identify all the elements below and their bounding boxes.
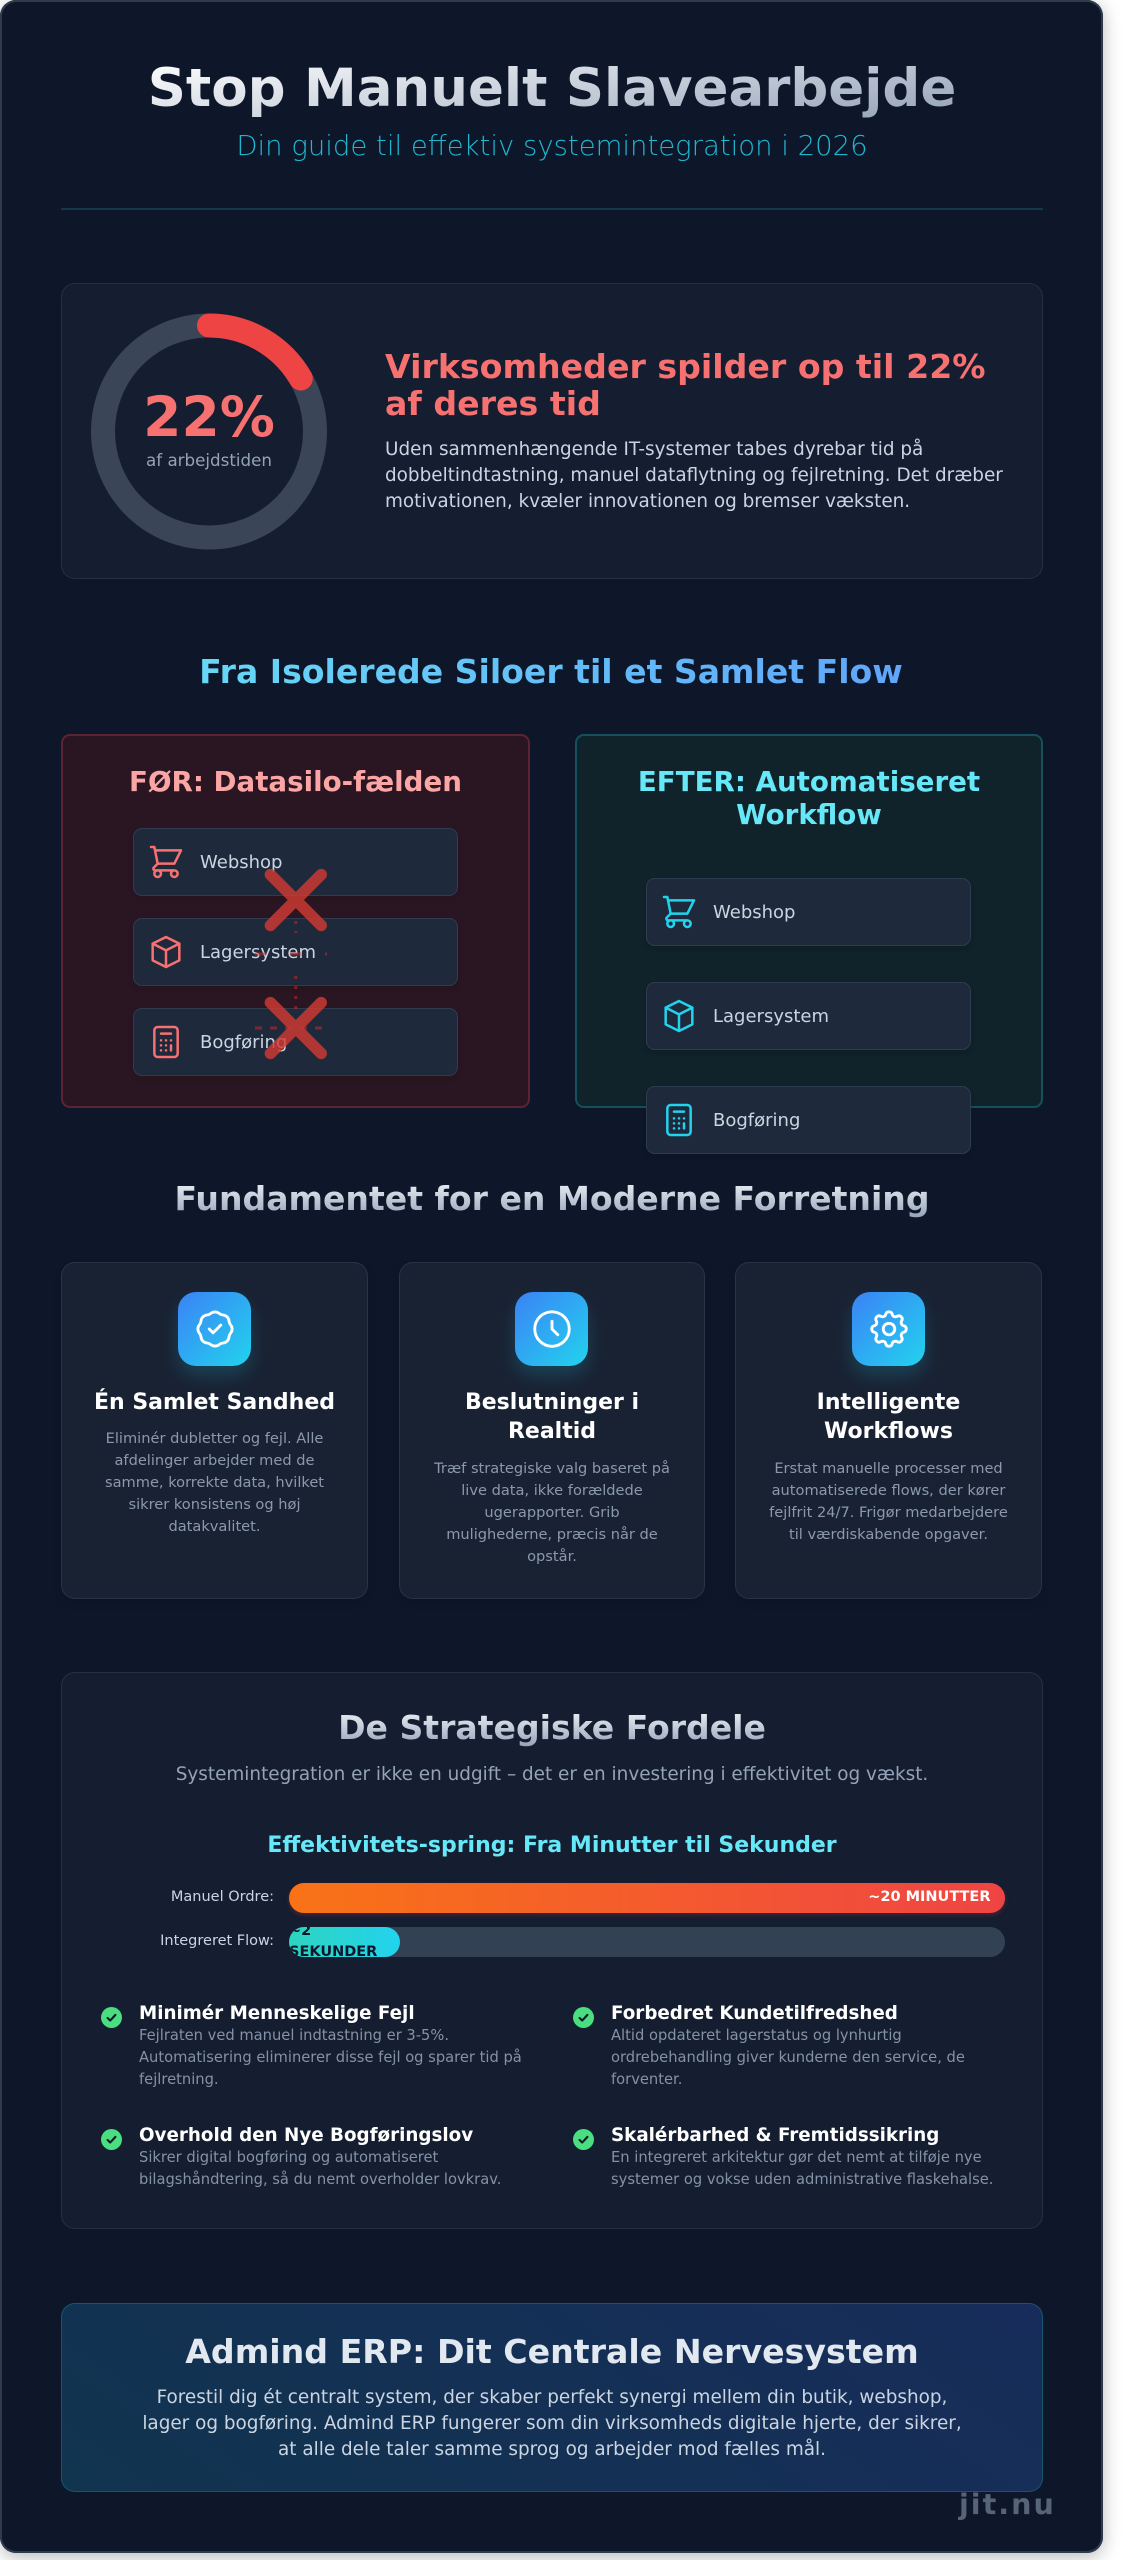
card text: ugerapporter. Grib — [484, 1504, 620, 1521]
system: lagersystem: Lagersystem — [200, 942, 316, 963]
benefit: bookkeeping law: Sikrer digital bogføring og automatiseret — [139, 2149, 438, 2166]
donut value: 22% — [143, 385, 275, 449]
system: bogforing — [646, 1086, 971, 1154]
card text — [105, 1430, 324, 1535]
bar label: manual: Manuel Ordre: — [171, 1889, 274, 1905]
card: intelligent workflows — [735, 1262, 1042, 1599]
system: lagersystem — [646, 982, 971, 1050]
stat body text — [385, 438, 1003, 512]
after heading: Workflow — [736, 798, 882, 831]
card: realtime decisions — [399, 1262, 705, 1599]
card text: automatiserede flows, der kører — [772, 1482, 1005, 1499]
benefit: fewer errors: Fejlraten ved manuel indtastning er 3-5%. — [139, 2027, 449, 2044]
bar: manual order: ~20 MINUTTER — [868, 1889, 990, 1905]
card heading: Workflows — [824, 1419, 953, 1444]
benefits heading: De Strategiske Fordele — [338, 1708, 766, 1747]
title: Stop Manuelt Slavearbejde — [148, 58, 956, 119]
benefit: scalability: systemer og vokse uden administrative flaskehalse. — [611, 2171, 993, 2188]
panel: before — [61, 734, 530, 1108]
card text: Erstat manuelle processer med — [774, 1460, 1003, 1477]
benefit: bookkeeping law: bilagshåndtering, så du nemt overholder lovkrav. — [139, 2171, 501, 2188]
system: webshop: Webshop — [200, 852, 282, 873]
stat body text: dobbeltindtastning, manuel dataflytning og fejlretning. Det dræber — [385, 465, 1003, 486]
card text: Eliminér dubletter og fejl. Alle — [106, 1430, 323, 1447]
benefit: fewer errors: Minimér Menneskelige Fejl — [139, 2003, 415, 2024]
donut caption: af arbejdstiden — [146, 450, 272, 470]
callout text: lager og bogføring. Admind ERP fungerer som din virksomheds digitale hjerte, der sikrer, — [142, 2413, 962, 2434]
system: bogforing — [133, 1008, 458, 1076]
watermark: jit.nu — [959, 2487, 1056, 2521]
benefit: customer satisfaction: forventer. — [611, 2071, 682, 2088]
after heading — [638, 765, 980, 831]
benefit: scalability: Skalérbarhed & Fremtidssikring — [611, 2125, 939, 2146]
callout text: at alle dele taler samme sprog og arbejder mod fælles mål. — [278, 2439, 826, 2460]
card heading: Én Samlet Sandhed — [94, 1390, 335, 1415]
benefit: fewer errors: fejlretning. — [139, 2071, 219, 2088]
heading: foundation: Fundamentet for en Moderne Forretning — [174, 1179, 930, 1218]
card text — [434, 1460, 670, 1565]
card heading — [465, 1390, 639, 1444]
stat body text: Uden sammenhængende IT-systemer tabes dyrebar tid på — [385, 439, 923, 460]
panel: strategic benefits — [61, 1672, 1043, 2229]
stat heading — [385, 347, 986, 423]
card: single truth — [61, 1262, 368, 1599]
bar: integrated flow — [289, 1927, 1005, 1957]
panel: Admind ERP callout — [61, 2303, 1043, 2492]
before heading: FØR: Datasilo-fælden — [129, 765, 462, 798]
broken connections with crosses — [255, 868, 327, 1060]
benefit: fewer errors — [101, 2003, 522, 2088]
callout text: Forestil dig ét centralt system, der skaber perfekt synergi mellem din butik, webshop, — [157, 2387, 947, 2408]
system: bogforing: Bogføring — [713, 1110, 800, 1131]
bar label: integrated: Integreret Flow: — [160, 1933, 274, 1949]
bar chart: manual vs integrated — [160, 1882, 1007, 1957]
system: webshop — [646, 878, 971, 946]
panel: after — [575, 734, 1043, 1108]
chart title: Effektivitets-spring: Fra Minutter til Sekunder — [267, 1833, 837, 1858]
card text: live data, ikke forældede — [461, 1482, 643, 1499]
system: lagersystem: Lagersystem — [713, 1006, 829, 1027]
benefits intro: Systemintegration er ikke en udgift – det er en investering i effektivitet og vækst. — [176, 1764, 928, 1785]
benefit: customer satisfaction: Altid opdateret lagerstatus og lynhurtig — [611, 2027, 902, 2044]
benefit: bookkeeping law — [101, 2125, 501, 2188]
card heading: Realtid — [508, 1419, 596, 1444]
subtitle: Din guide til effektiv systemintegration i 2026 — [236, 130, 868, 162]
bar: manual order — [289, 1883, 1005, 1913]
system: lagersystem — [133, 918, 458, 986]
card text: mulighederne, præcis når de — [446, 1526, 658, 1543]
icon: clock — [515, 1292, 588, 1366]
stat heading: Virksomheder spilder op til 22% — [385, 347, 986, 386]
benefit: fewer errors: Automatisering eliminerer disse fejl og sparer tid på — [139, 2049, 522, 2066]
card heading: Beslutninger i — [465, 1390, 639, 1415]
card text: samme, korrekte data, hvilket — [105, 1474, 324, 1491]
donut chart: 22% — [91, 314, 327, 550]
card text: afdelinger arbejder med de — [114, 1452, 315, 1469]
benefit: scalability: En integreret arkitektur gør det nemt at tilføje nye — [611, 2149, 982, 2166]
system: webshop: Webshop — [713, 902, 795, 923]
card text: sikrer konsistens og høj — [128, 1496, 301, 1513]
card text: opstår. — [527, 1548, 577, 1565]
stat heading: af deres tid — [385, 384, 601, 423]
panel: 22 percent stat — [61, 283, 1043, 579]
benefit: scalability — [573, 2125, 993, 2188]
benefit: customer satisfaction — [573, 2003, 965, 2088]
card text: til værdiskabende opgaver. — [789, 1526, 988, 1543]
card heading: Intelligente — [817, 1390, 960, 1415]
card text: fejlfrit 24/7. Frigør medarbejdere — [769, 1504, 1008, 1521]
card text: Træf strategiske valg baseret på — [434, 1460, 670, 1477]
heading: silos to flow: Fra Isolerede Siloer til et Samlet Flow — [199, 652, 903, 691]
after heading: EFTER: Automatiseret — [638, 765, 980, 798]
callout text — [142, 2387, 962, 2460]
system: bogforing: Bogføring — [200, 1032, 287, 1053]
system: webshop — [133, 828, 458, 896]
card text — [769, 1460, 1008, 1543]
card heading — [817, 1390, 960, 1444]
icon: cog — [852, 1292, 925, 1366]
benefit: bookkeeping law: Overhold den Nye Bogføringslov — [139, 2125, 473, 2146]
callout heading: Admind ERP: Dit Centrale Nervesystem — [185, 2332, 919, 2371]
icon: badge check — [178, 1292, 251, 1366]
stat body text: motivationen, kvæler innovationen og bremser væksten. — [385, 491, 910, 512]
benefit: customer satisfaction: ordrebehandling giver kunderne den service, de — [611, 2049, 965, 2066]
benefit: customer satisfaction: Forbedret Kundetilfredshed — [611, 2003, 898, 2024]
card text: datakvalitet. — [168, 1518, 261, 1535]
